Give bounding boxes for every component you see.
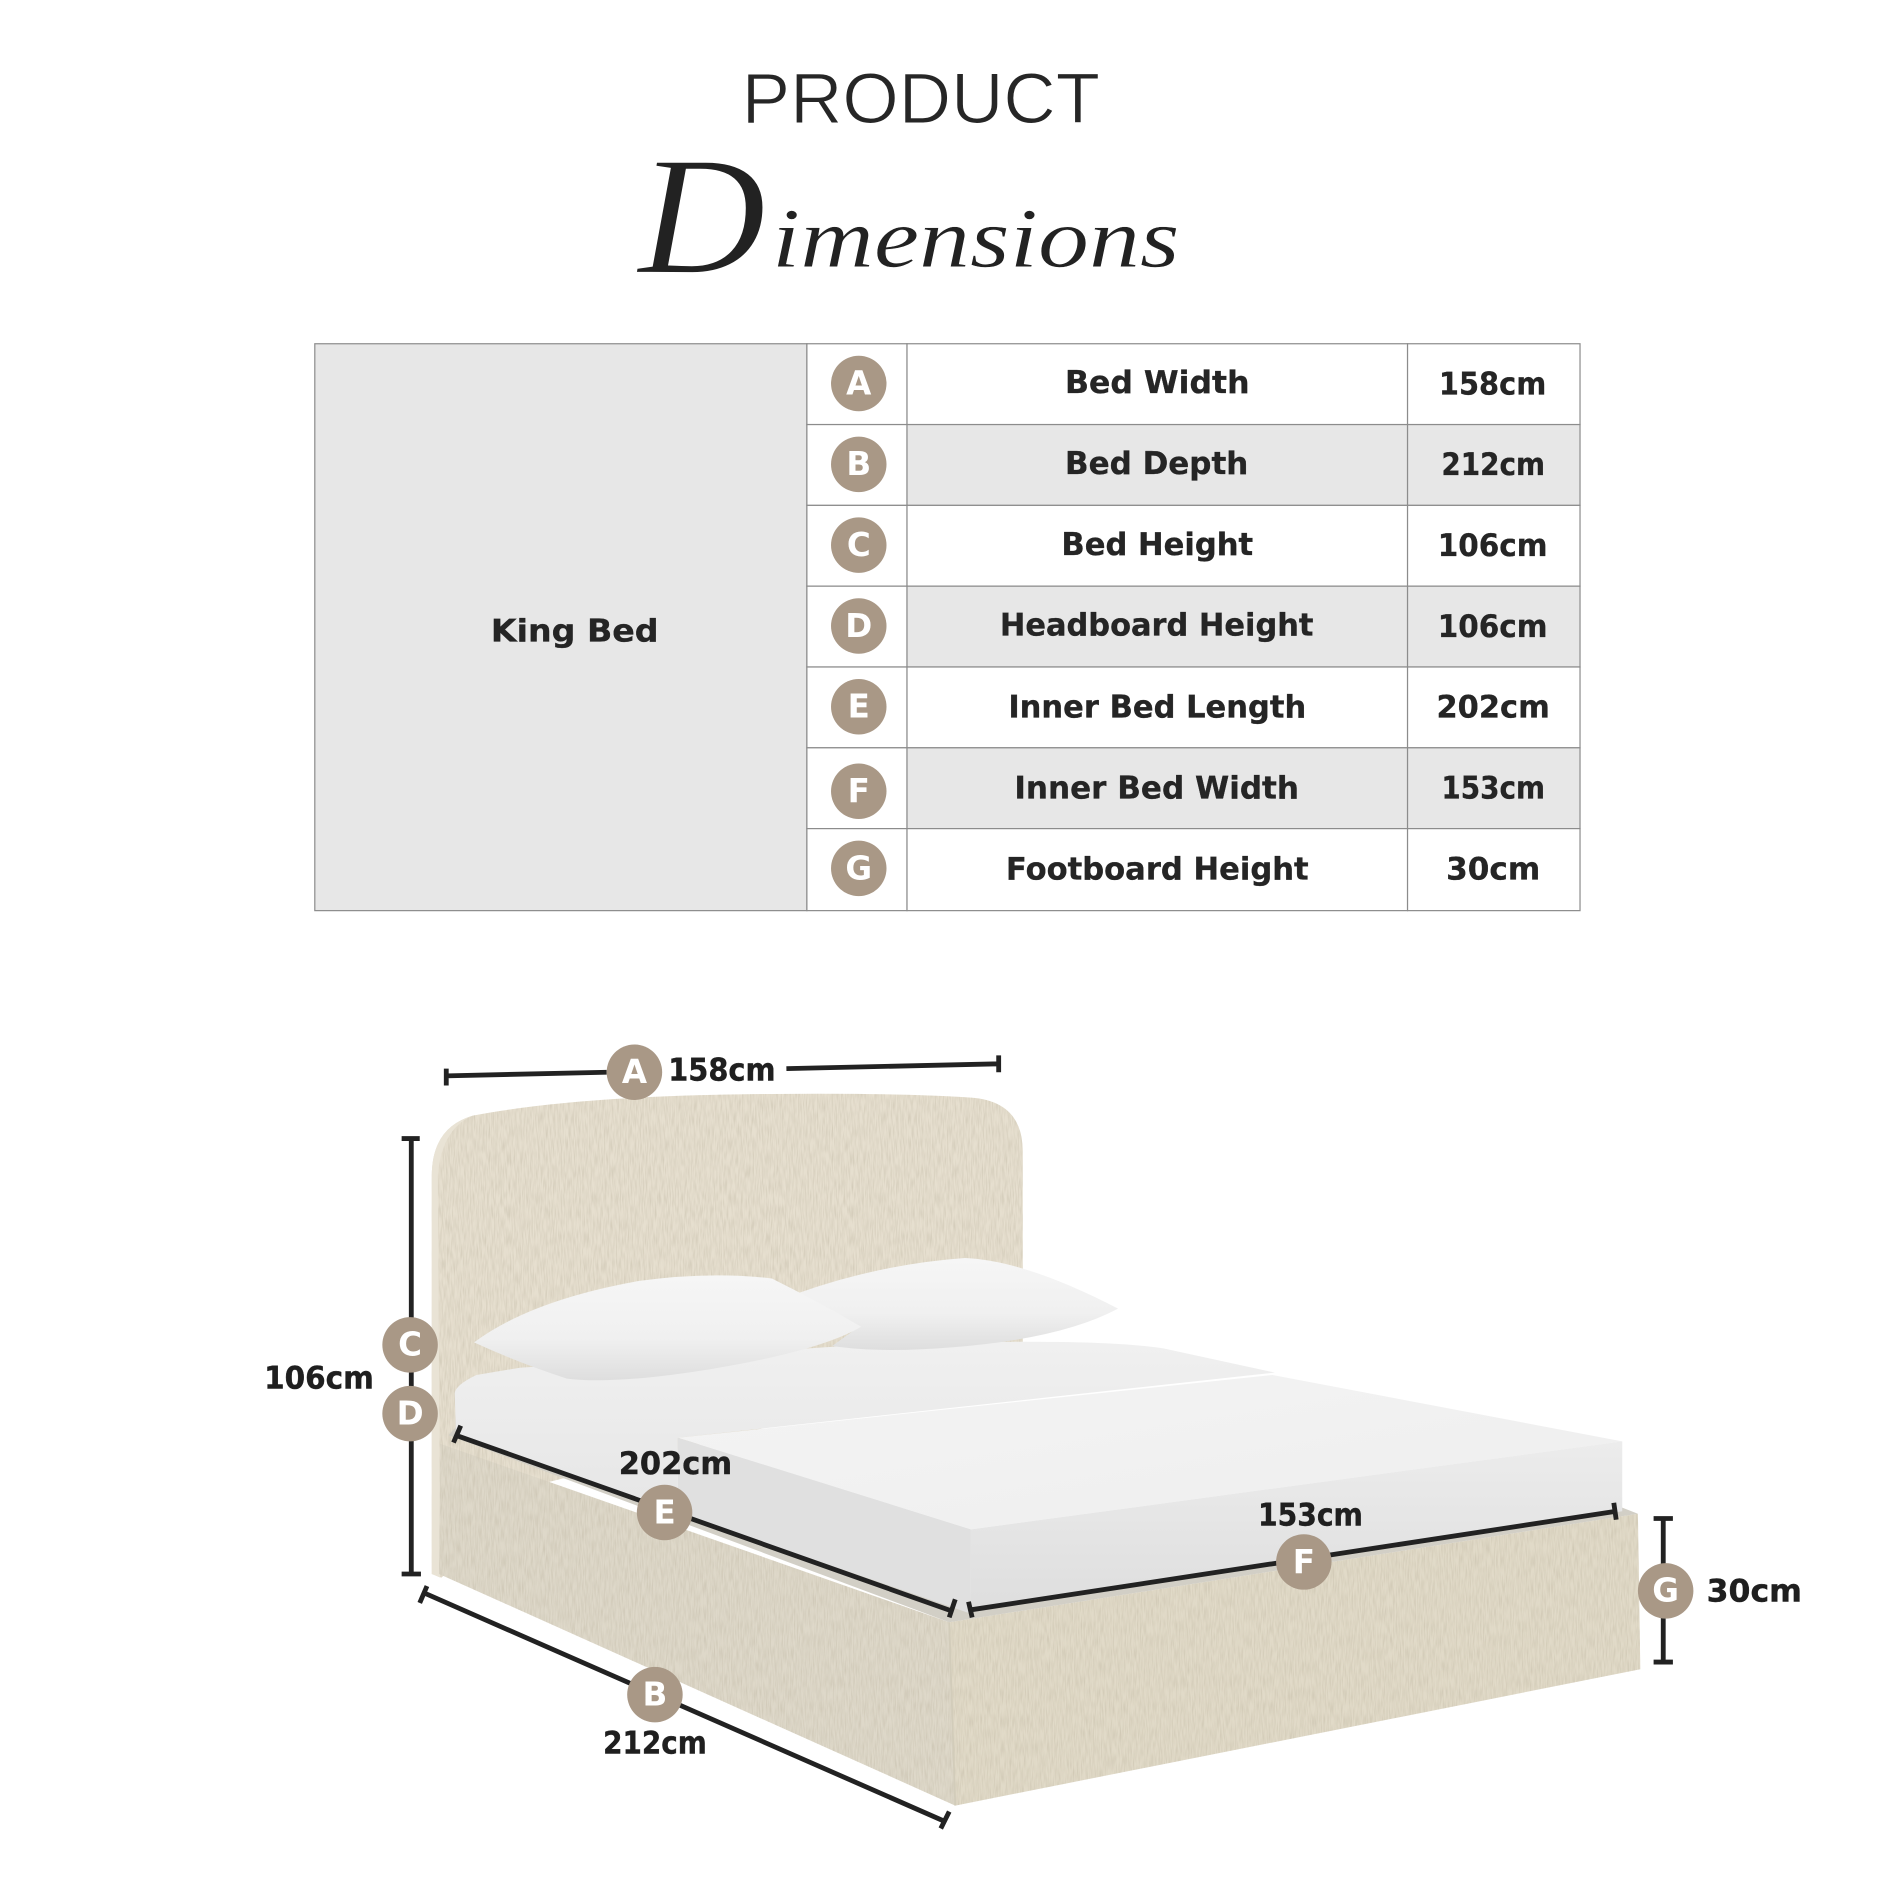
mattress left side <box>678 1438 971 1614</box>
base front face <box>949 1514 1640 1806</box>
table row C <box>807 505 1580 586</box>
table row C: C <box>847 526 871 564</box>
table row G: G <box>845 849 872 887</box>
bed illustration <box>432 1094 1640 1806</box>
table row G: Footboard Height <box>1006 851 1309 887</box>
dimension A: 158cm <box>668 1053 776 1089</box>
headboard left rim <box>432 1116 473 1578</box>
dimensions C and D: D <box>397 1394 424 1432</box>
table row B: B <box>846 445 871 483</box>
table row D <box>807 586 1580 667</box>
dimension B: B <box>643 1675 667 1713</box>
dimension E: 202cm <box>619 1446 732 1482</box>
table row F: Inner Bed Width <box>1014 770 1299 806</box>
table row D: Headboard Height <box>1000 608 1313 644</box>
size table <box>315 344 1580 911</box>
title: PRODUCT: PRODUCT <box>742 60 1100 139</box>
table row G <box>807 829 1580 911</box>
table row F: 153cm <box>1441 770 1545 806</box>
right pillow <box>798 1258 1118 1350</box>
table cell: King Bed: King Bed <box>491 614 659 650</box>
table row B: Bed Depth <box>1065 446 1248 482</box>
dimension G: G <box>1652 1572 1679 1610</box>
base left face <box>439 1444 955 1806</box>
dimensions C and D: C <box>398 1326 422 1364</box>
table cell: King Bed <box>315 344 807 911</box>
table row A: Bed Width <box>1065 365 1250 401</box>
table row E: Inner Bed Length <box>1008 690 1306 726</box>
dimension B: 212cm <box>603 1726 707 1762</box>
table row A <box>807 344 1580 425</box>
mattress lip <box>449 1427 1638 1622</box>
rear fitted sheet <box>455 1342 1275 1512</box>
dimensions C and D <box>264 1139 438 1574</box>
mattress top <box>678 1375 1622 1529</box>
title: Dimensions script: D <box>636 123 766 310</box>
table row B <box>807 425 1580 505</box>
dimension A: A <box>622 1053 648 1091</box>
dimension E: E <box>653 1493 676 1531</box>
dimension B <box>420 1586 949 1828</box>
dimension E <box>454 1426 955 1617</box>
dimension G <box>1638 1517 1802 1662</box>
dimension F: 153cm <box>1258 1498 1363 1534</box>
table row F: F <box>848 772 870 810</box>
table row E: E <box>848 688 870 726</box>
headboard <box>432 1094 1023 1578</box>
mattress front side <box>971 1441 1622 1610</box>
title: Dimensions script: imensions <box>772 193 1180 286</box>
table row E: 202cm <box>1436 690 1550 726</box>
table row B: 212cm <box>1441 447 1545 483</box>
table row D: 106cm <box>1438 609 1547 645</box>
table row E <box>807 667 1580 748</box>
dimension F: F <box>1293 1543 1315 1581</box>
table row C: 106cm <box>1438 528 1547 564</box>
dimension A <box>446 1045 999 1100</box>
table row G: 30cm <box>1446 851 1540 887</box>
dimension F <box>969 1498 1616 1617</box>
dimension G: 30cm <box>1707 1574 1802 1610</box>
left pillow <box>474 1275 861 1380</box>
table row A: A <box>846 364 872 402</box>
table row A: 158cm <box>1439 366 1546 402</box>
base corner shadow <box>949 1622 955 1806</box>
table row F <box>807 748 1580 829</box>
table row D: D <box>845 607 872 645</box>
table row C: Bed Height <box>1061 527 1253 563</box>
dimensions C and D: 106cm <box>264 1360 374 1396</box>
